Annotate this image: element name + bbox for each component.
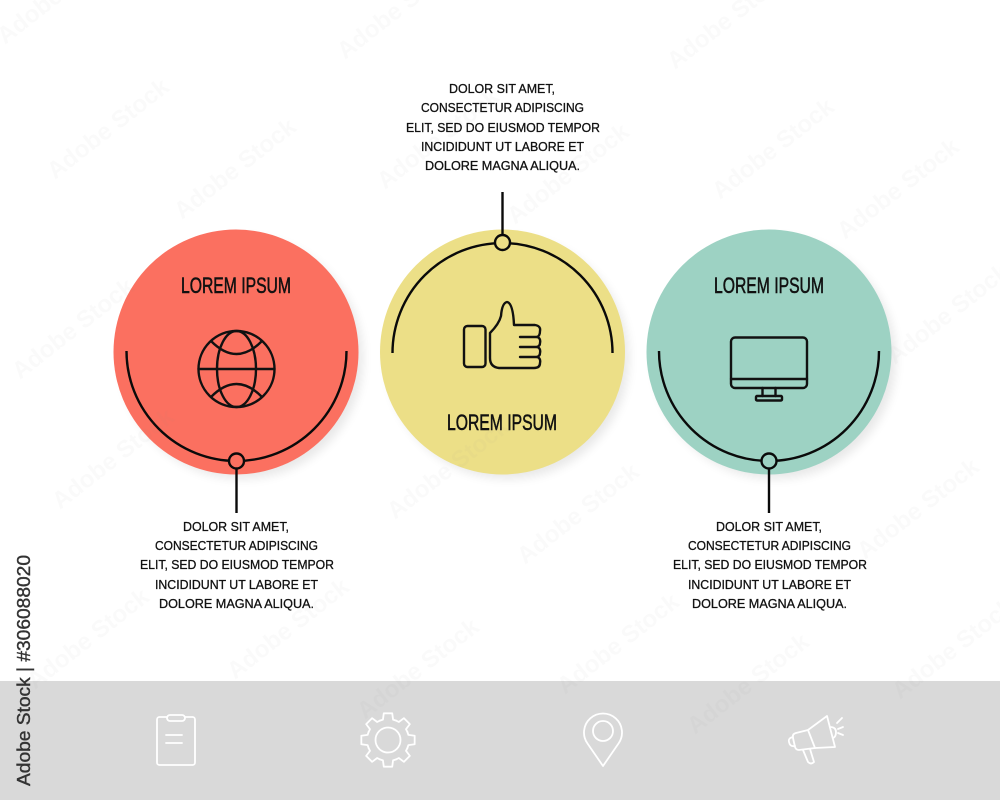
watermark: Adobe Stock xyxy=(707,93,840,205)
watermark: Adobe Stock xyxy=(372,83,505,195)
text block: bottom left: DOLOR SIT AMET, xyxy=(183,520,289,534)
panel: right circle: LOREM IPSUM xyxy=(714,273,824,298)
text block: bottom right: CONSECTETUR ADIPISCING xyxy=(688,539,851,553)
watermark: Adobe Stock xyxy=(682,628,815,740)
text block: bottom right: DOLORE MAGNA ALIQUA. xyxy=(692,597,847,611)
panel: left circle xyxy=(114,230,363,513)
panel: middle circle xyxy=(380,192,629,479)
watermark: Adobe Stock xyxy=(47,403,180,515)
text block: bottom right: ELIT, SED DO EIUSMOD TEMPOR xyxy=(673,558,867,572)
text block: bottom left: ELIT, SED DO EIUSMOD TEMPOR xyxy=(140,558,334,572)
text block: bottom left: INCIDIDUNT UT LABORE ET xyxy=(155,578,318,592)
text block: top: ELIT, SED DO EIUSMOD TEMPOR xyxy=(406,121,600,135)
icon: clipboard xyxy=(157,715,195,765)
text block: top xyxy=(406,82,600,173)
watermark: Adobe Stock xyxy=(512,458,645,570)
watermark: Adobe Stock xyxy=(382,413,515,525)
text block: top: CONSECTETUR ADIPISCING xyxy=(421,101,584,115)
icon: megaphone xyxy=(789,716,843,764)
icon: gear xyxy=(361,713,415,767)
watermark: Adobe Stock xyxy=(832,133,965,245)
text block: top: INCIDIDUNT UT LABORE ET xyxy=(421,140,584,154)
text block: bottom right: DOLOR SIT AMET, xyxy=(716,520,822,534)
watermark: Adobe Stock xyxy=(552,588,685,700)
watermark: Adobe Stock xyxy=(852,453,985,565)
text block: bottom left xyxy=(140,520,334,611)
text block: bottom left: CONSECTETUR ADIPISCING xyxy=(155,539,318,553)
watermark: Adobe Stock xyxy=(7,273,140,385)
text block: bottom left: DOLORE MAGNA ALIQUA. xyxy=(159,597,314,611)
watermark: Adobe Stock xyxy=(169,113,302,225)
footer band xyxy=(0,681,1000,800)
panel: middle circle: LOREM IPSUM xyxy=(447,410,557,435)
icon: location pin xyxy=(584,714,622,766)
text block: top: DOLORE MAGNA ALIQUA. xyxy=(425,159,580,173)
watermark: Adobe Stock xyxy=(352,613,485,725)
watermark: Adobe Stock xyxy=(222,573,355,685)
panel: left circle: LOREM IPSUM xyxy=(181,273,291,298)
watermark: Adobe Stock xyxy=(502,118,635,230)
stock id label: Adobe Stock | #306088020 xyxy=(13,555,34,786)
watermark: Adobe Stock xyxy=(22,583,155,695)
panel: right circle xyxy=(646,230,896,513)
text block: bottom right: INCIDIDUNT UT LABORE ET xyxy=(688,578,851,592)
text block: top: DOLOR SIT AMET, xyxy=(449,82,555,96)
text block: bottom right xyxy=(673,520,867,611)
watermark: Adobe Stock xyxy=(42,73,175,185)
